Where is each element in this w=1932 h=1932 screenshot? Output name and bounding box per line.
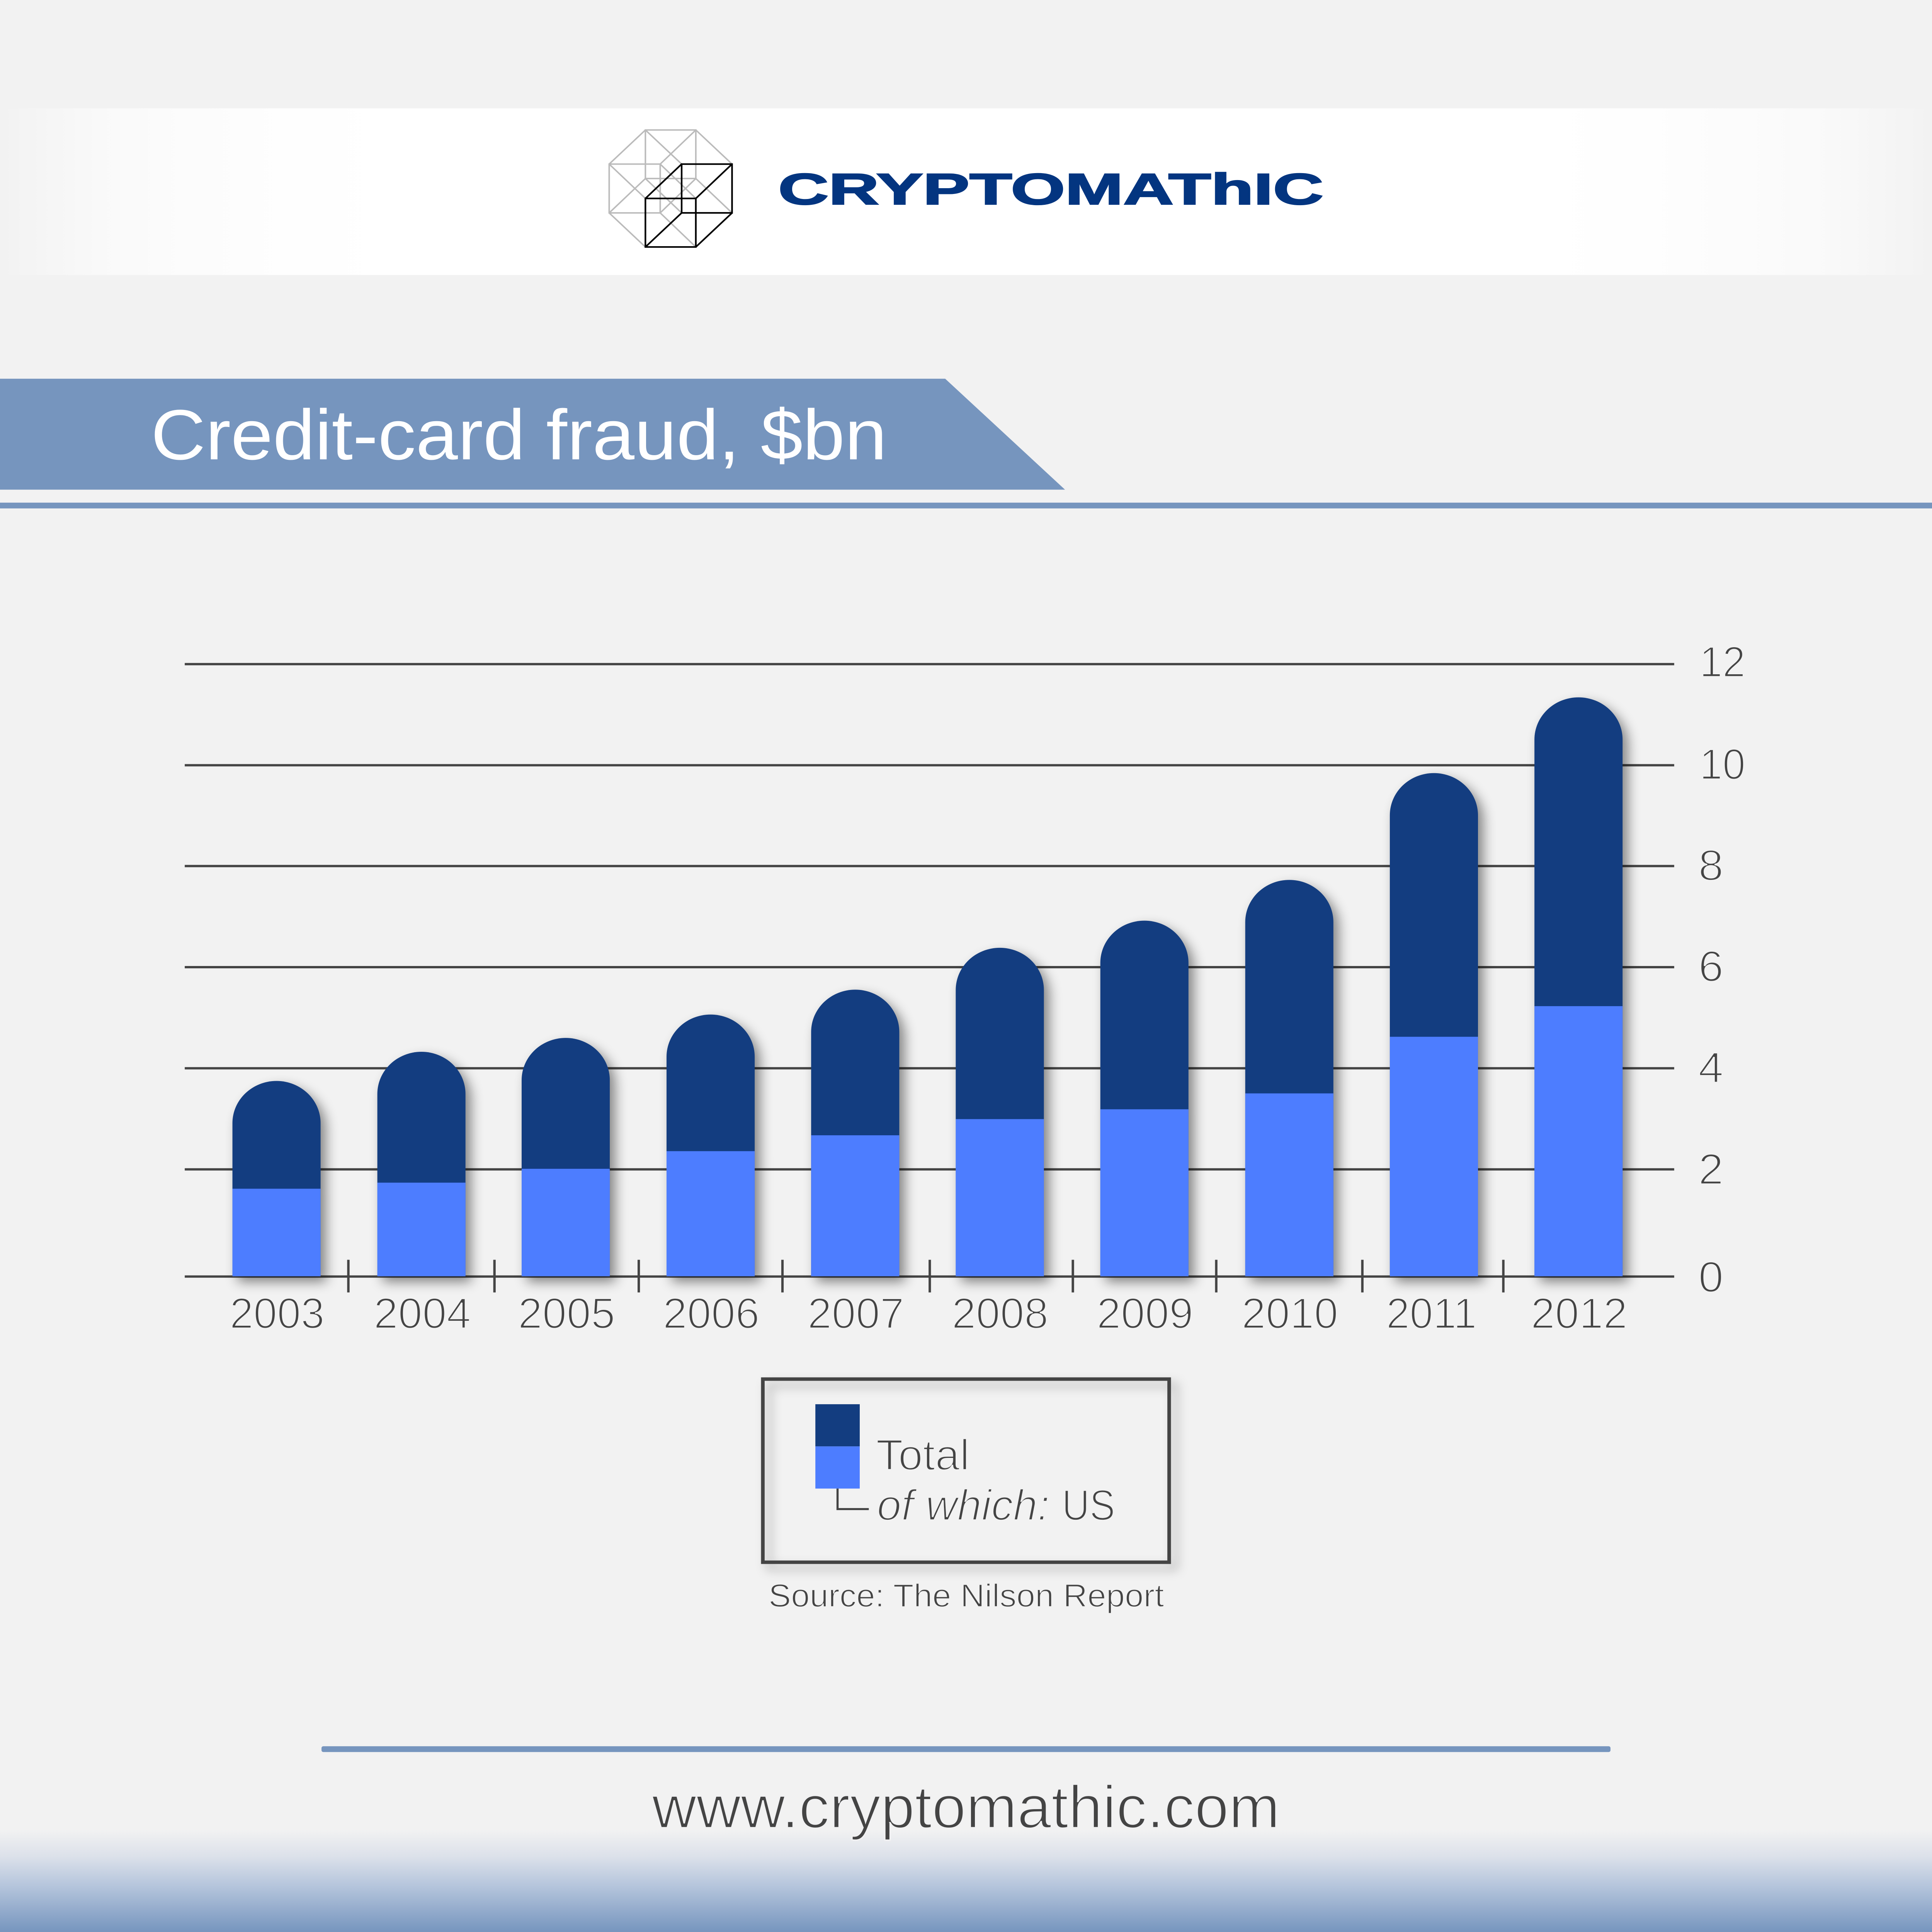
year labels: 2011: [1386, 1289, 1477, 1338]
bar 2012: [1534, 697, 1622, 1276]
y-axis labels: 8: [1698, 841, 1723, 889]
y-axis labels: 10: [1699, 740, 1745, 789]
legend swatch: US: [815, 1446, 860, 1488]
chart grid lines: [185, 663, 1674, 1278]
icon: Cryptomathic hypercube logo: [609, 130, 732, 247]
year labels: 2007: [808, 1289, 904, 1338]
year labels: 2004: [374, 1289, 471, 1338]
bar 2004: [378, 1052, 466, 1276]
legend swatch: total: [815, 1404, 860, 1446]
year labels: [230, 1289, 1628, 1338]
bar 2005: [522, 1038, 610, 1276]
y-axis labels: 4: [1698, 1044, 1723, 1092]
bar 2007: [811, 990, 899, 1276]
logo wordmark: CRYPTOMAThIC: [778, 165, 1323, 214]
title rule: [0, 503, 1932, 509]
bar 2003: [233, 1081, 321, 1276]
y-axis labels: 6: [1698, 942, 1723, 991]
chart: credit-card fraud stacked bars: [185, 638, 1745, 1338]
y-axis labels: [1698, 638, 1745, 1301]
year labels: 2009: [1097, 1289, 1193, 1338]
legend label: of which: of which:: [877, 1481, 1049, 1529]
legend box: [763, 1379, 1169, 1562]
year labels: 2003: [230, 1289, 325, 1338]
footer URL: www.cryptomathic.com: [652, 1773, 1280, 1840]
year labels: 2012: [1531, 1289, 1628, 1338]
title: Credit-card fraud, $bn: [151, 395, 887, 474]
legend label: US: US: [1062, 1481, 1115, 1529]
footer rule: [321, 1746, 1611, 1752]
bar 2010: [1245, 880, 1333, 1276]
y-axis labels: 0: [1698, 1253, 1723, 1301]
year labels: 2008: [952, 1289, 1048, 1338]
bar 2006: [667, 1015, 755, 1276]
bar 2008: [956, 948, 1044, 1276]
bar 2011: [1390, 773, 1478, 1276]
year labels: 2005: [518, 1289, 615, 1338]
axis ticks: [347, 1260, 1505, 1293]
y-axis labels: 2: [1698, 1145, 1723, 1194]
legend label: total: Total: [876, 1431, 969, 1479]
year labels: 2010: [1242, 1289, 1338, 1338]
footer gradient band: [0, 1830, 1932, 1932]
header band with logo: [0, 108, 1932, 275]
title banner: [0, 379, 1065, 490]
bar 2009: [1100, 921, 1189, 1276]
year labels: 2006: [663, 1289, 760, 1338]
source note: Source: The Nilson Report: [769, 1578, 1164, 1614]
legend connector: [838, 1488, 869, 1509]
y-axis labels: 12: [1699, 638, 1745, 686]
